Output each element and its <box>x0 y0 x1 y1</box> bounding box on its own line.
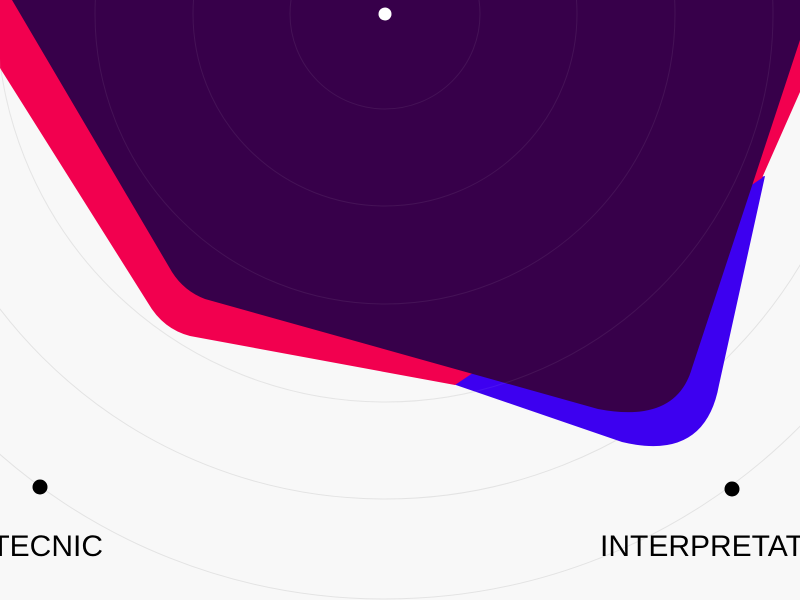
axis dot: interpretation <box>724 482 740 496</box>
axis dot: tecnic <box>32 480 48 494</box>
center dot <box>378 8 392 20</box>
grid circles over purple <box>0 0 773 402</box>
series: purple <box>12 0 800 412</box>
series: blue <box>450 176 765 446</box>
series: red <box>0 0 800 385</box>
